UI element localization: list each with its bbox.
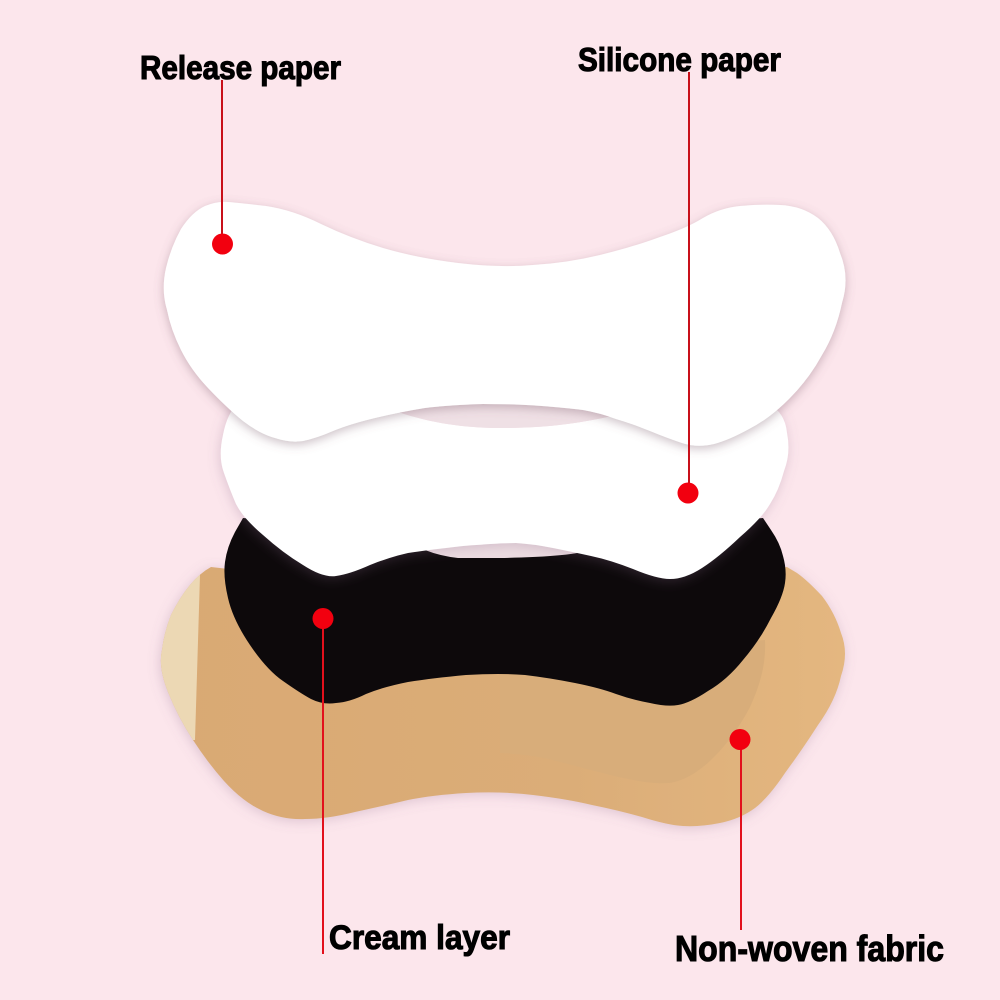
- callout: cream layer: [312, 608, 510, 957]
- fabric body: [161, 567, 845, 826]
- fabric cream tab: [161, 575, 200, 740]
- callout: silicone paper: [578, 41, 781, 504]
- gap highlight: lower: [425, 530, 585, 558]
- callout: non-woven fabric: [675, 729, 944, 969]
- layer: silicone paper: [221, 400, 788, 579]
- gap highlight: upper: [398, 400, 610, 428]
- layer: non-woven fabric: [150, 560, 845, 826]
- fabric inner patch: [500, 640, 765, 783]
- layer: release paper: [164, 202, 846, 446]
- label: silicone paper: Silicone paper: [578, 41, 781, 78]
- callout: release paper: [140, 49, 341, 254]
- layer: cream layer: [224, 518, 786, 706]
- label: cream layer: Cream layer: [329, 919, 510, 957]
- label: release paper: Release paper: [140, 49, 341, 86]
- label: non-woven fabric: Non-woven fabric: [675, 928, 944, 969]
- infographic: heel patch layers: [142, 46, 944, 962]
